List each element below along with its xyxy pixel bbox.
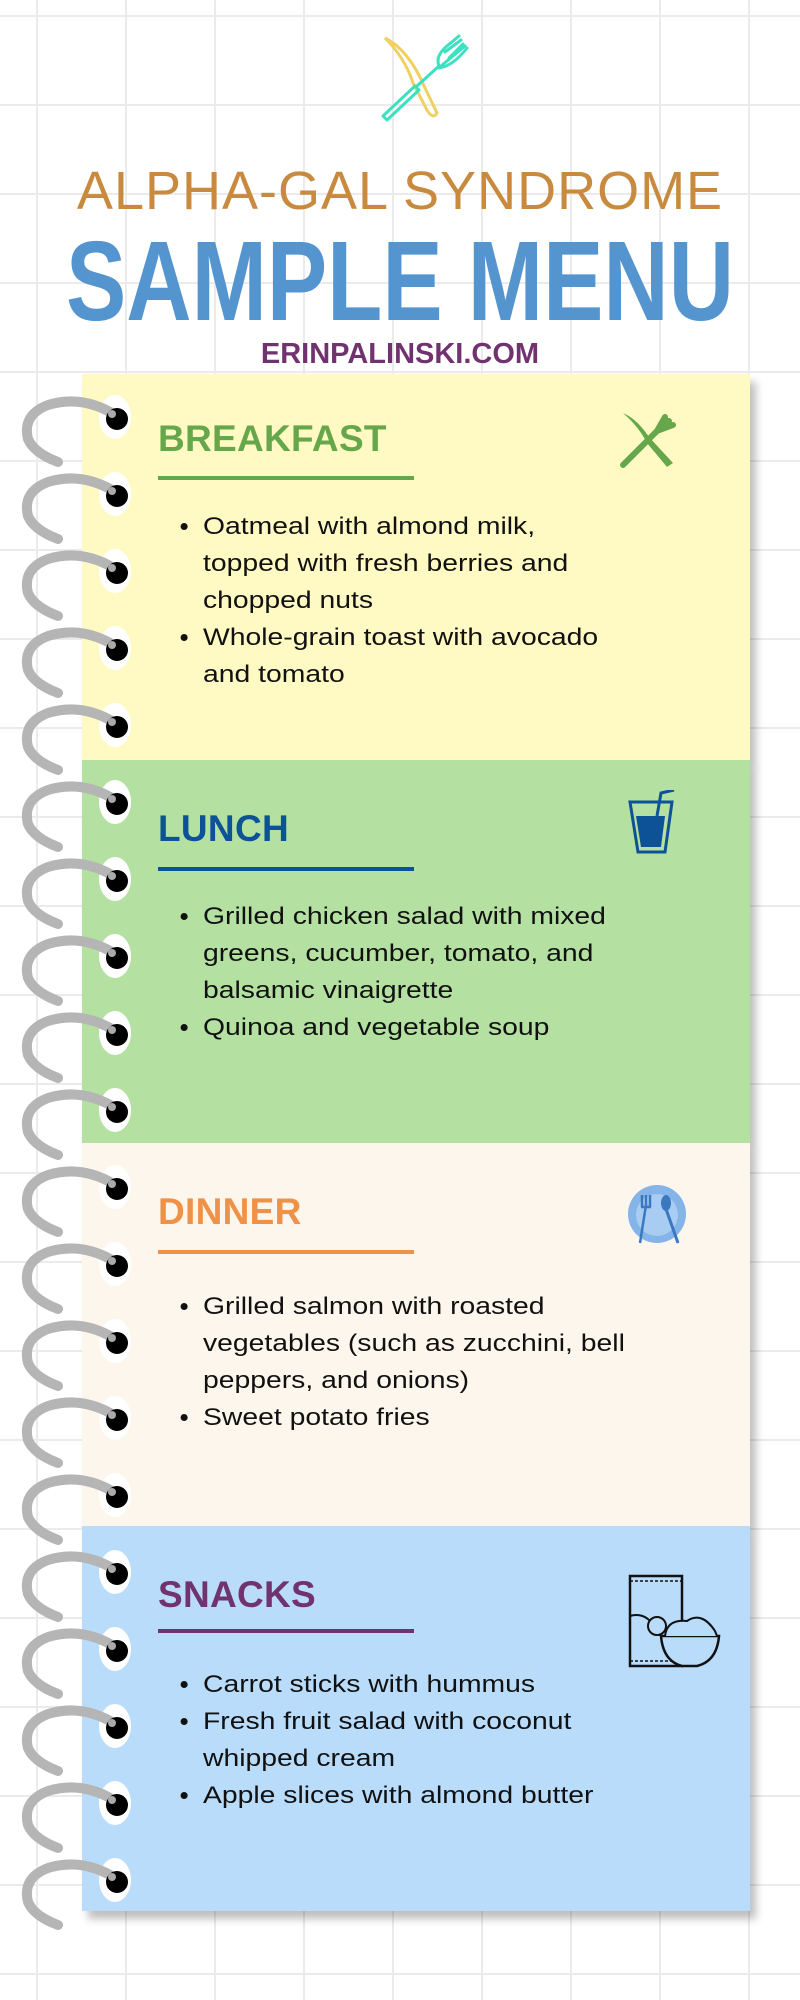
icon: cutlery bbox=[620, 413, 676, 468]
list: dinner items bbox=[180, 1293, 625, 1431]
panel: dinner bbox=[82, 1143, 750, 1526]
underline bbox=[158, 1250, 414, 1254]
underline bbox=[158, 476, 414, 480]
heading: dinner: DINNER bbox=[158, 1191, 302, 1232]
list: breakfast items: Oatmeal with almond milk, bbox=[203, 513, 535, 540]
panel: snacks bbox=[82, 1526, 750, 1911]
panel: breakfast bbox=[82, 374, 750, 760]
heading: snacks: SNACKS bbox=[158, 1574, 316, 1615]
list: snack items: whipped cream bbox=[203, 1745, 395, 1772]
heading: breakfast: BREAKFAST bbox=[158, 418, 387, 459]
panel: lunch bbox=[82, 760, 750, 1143]
icon: knife and fork bbox=[381, 34, 469, 122]
list: dinner items: vegetables (such as zucchini, bell bbox=[203, 1330, 625, 1357]
list: breakfast items: topped with fresh berries and bbox=[203, 550, 568, 577]
title: Alpha-gal syndrome: ALPHA-GAL SYNDROME bbox=[77, 161, 723, 221]
underline bbox=[158, 1629, 414, 1633]
list: breakfast items bbox=[180, 513, 598, 688]
list: lunch items: Quinoa and vegetable soup bbox=[203, 1014, 549, 1041]
list: snack items bbox=[180, 1671, 593, 1809]
list: dinner items: Sweet potato fries bbox=[203, 1404, 430, 1431]
list: snack items: Fresh fruit salad with coconut bbox=[203, 1708, 571, 1735]
underline bbox=[158, 867, 414, 871]
list: lunch items: balsamic vinaigrette bbox=[203, 977, 453, 1004]
spiral binding rings bbox=[22, 395, 131, 1930]
icon: snacks bag and bowl bbox=[628, 1574, 720, 1668]
icon: drink bbox=[628, 790, 674, 854]
list: breakfast items: and tomato bbox=[203, 661, 345, 688]
heading: lunch: LUNCH bbox=[158, 808, 289, 849]
list: snack items: Apple slices with almond butter bbox=[203, 1782, 593, 1809]
list: lunch items: greens, cucumber, tomato, and bbox=[203, 940, 593, 967]
list: dinner items: peppers, and onions) bbox=[203, 1367, 469, 1394]
list: dinner items: Grilled salmon with roasted bbox=[203, 1293, 545, 1320]
website: ERINPALINSKI.COM bbox=[261, 338, 539, 370]
list: breakfast items: Whole-grain toast with avocado bbox=[203, 624, 598, 651]
title: Sample menu: SAMPLE MENU bbox=[66, 218, 734, 344]
list: lunch items: Grilled chicken salad with mixed bbox=[203, 903, 606, 930]
list: lunch items bbox=[180, 903, 606, 1041]
icon: plate bbox=[628, 1185, 686, 1244]
list: snack items: Carrot sticks with hummus bbox=[203, 1671, 535, 1698]
list: breakfast items: chopped nuts bbox=[203, 587, 373, 614]
